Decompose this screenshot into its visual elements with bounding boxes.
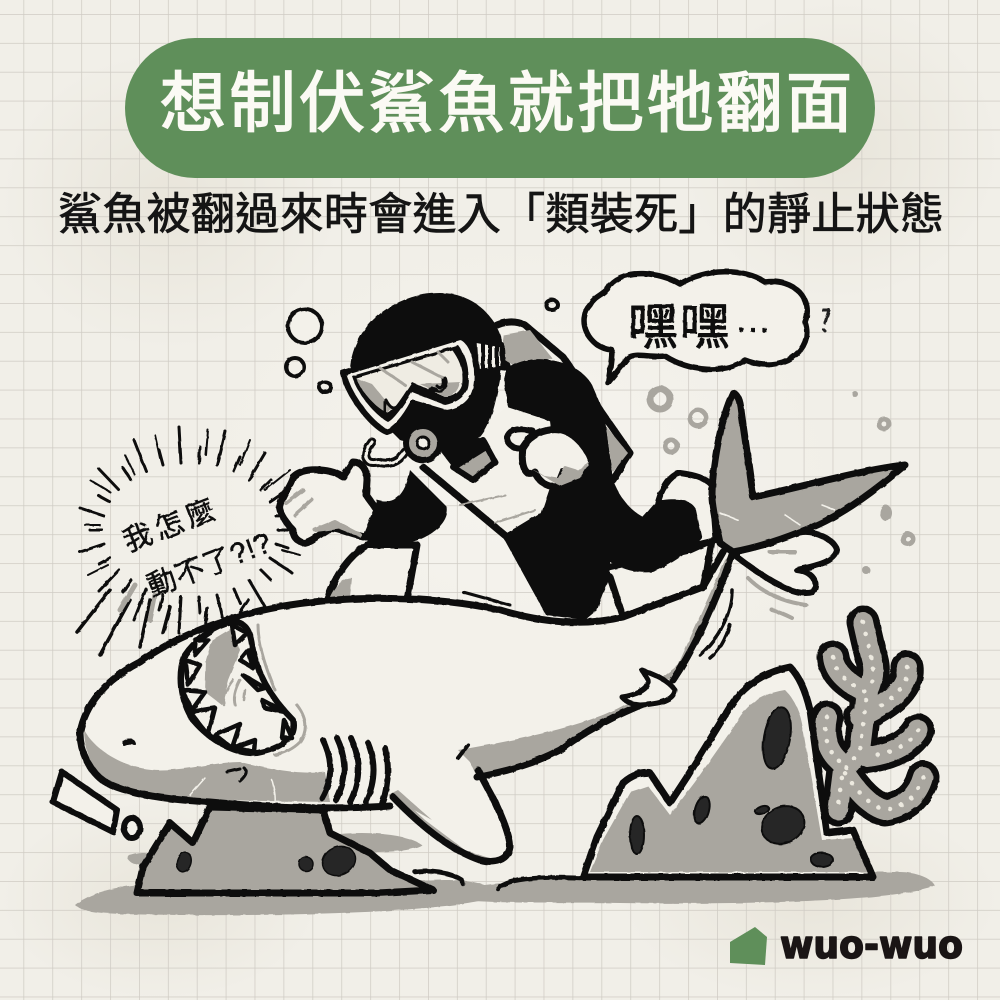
left glove xyxy=(280,462,377,543)
startled speech text xyxy=(119,493,276,604)
right shoulder black xyxy=(504,359,613,490)
illustration xyxy=(53,272,935,915)
right glove xyxy=(507,429,593,487)
logo: house icon xyxy=(730,927,767,965)
title text: 想制伏鯊魚就把牠翻面 xyxy=(160,66,852,140)
tail stalk shading xyxy=(458,690,672,777)
speech bubble xyxy=(584,272,807,383)
shark xyxy=(80,552,733,861)
title banner xyxy=(125,38,875,178)
torso and legs black xyxy=(503,359,702,620)
hose xyxy=(366,442,405,463)
subtitle: 鯊魚被翻過來時會進入「類裝死」的靜止狀態 xyxy=(58,190,944,239)
air tank xyxy=(493,322,630,480)
mask strap xyxy=(474,340,503,372)
pale leg xyxy=(327,545,417,600)
exclamation dot xyxy=(124,818,140,838)
exclamation mark xyxy=(53,772,140,838)
shark body xyxy=(80,552,733,861)
teeth xyxy=(182,625,292,752)
eye and nostril xyxy=(124,740,135,745)
bubble ellipsis: … xyxy=(735,299,771,340)
right glove fingers behind tail xyxy=(737,532,837,593)
coral xyxy=(826,622,923,810)
startled speech text: 動不了?!? xyxy=(143,526,276,604)
bubble text: 嘿嘿 xyxy=(628,299,730,355)
shark outline xyxy=(80,552,733,861)
shark belly shading xyxy=(84,730,330,802)
dive mask xyxy=(343,337,477,432)
right rock xyxy=(583,667,873,877)
cuff and right wrist xyxy=(657,473,716,545)
black left arm xyxy=(367,470,447,542)
small flipper xyxy=(622,670,675,705)
startled speech text: 我怎麼 xyxy=(119,493,220,559)
mouth xyxy=(181,622,305,755)
logo: wuo-wuo wordmark: wuo-wuo xyxy=(780,923,963,967)
tail fin xyxy=(712,393,905,552)
bubble punctuation xyxy=(823,310,829,331)
pale chest xyxy=(423,407,556,537)
pale flipper leg xyxy=(597,540,712,617)
motion marks xyxy=(748,552,806,618)
regulator xyxy=(406,426,440,460)
gills xyxy=(322,738,388,804)
bubbles xyxy=(286,300,913,574)
hood xyxy=(350,293,503,452)
diver xyxy=(280,293,716,620)
burst lines xyxy=(77,427,302,655)
ground shadows xyxy=(75,833,935,915)
left rock xyxy=(137,807,580,893)
collar piece xyxy=(453,440,495,480)
